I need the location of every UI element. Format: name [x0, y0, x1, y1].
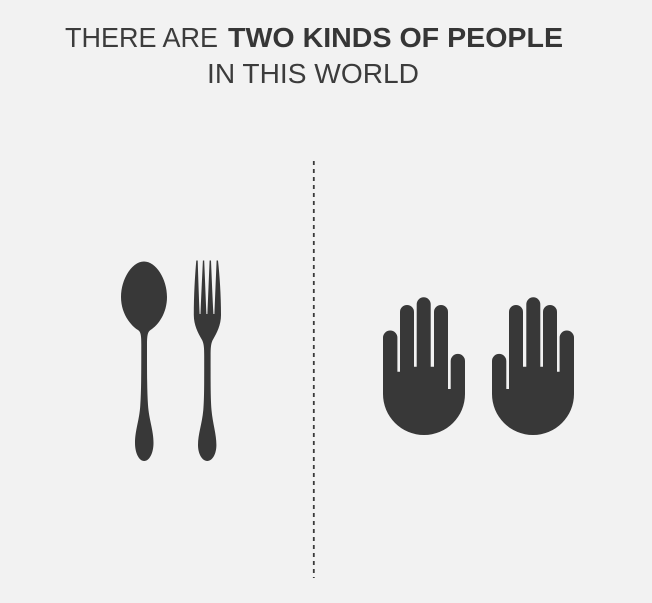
title: TWO KINDS OF PEOPLE [228, 22, 563, 53]
title: THERE ARE [65, 22, 218, 53]
icon: left hand [383, 297, 465, 435]
divider: dashed line [313, 161, 315, 578]
title [65, 22, 563, 89]
icon: fork [194, 260, 221, 461]
icon: right hand [492, 297, 574, 435]
icon: spoon [121, 262, 167, 461]
title: IN THIS WORLD [207, 58, 419, 89]
